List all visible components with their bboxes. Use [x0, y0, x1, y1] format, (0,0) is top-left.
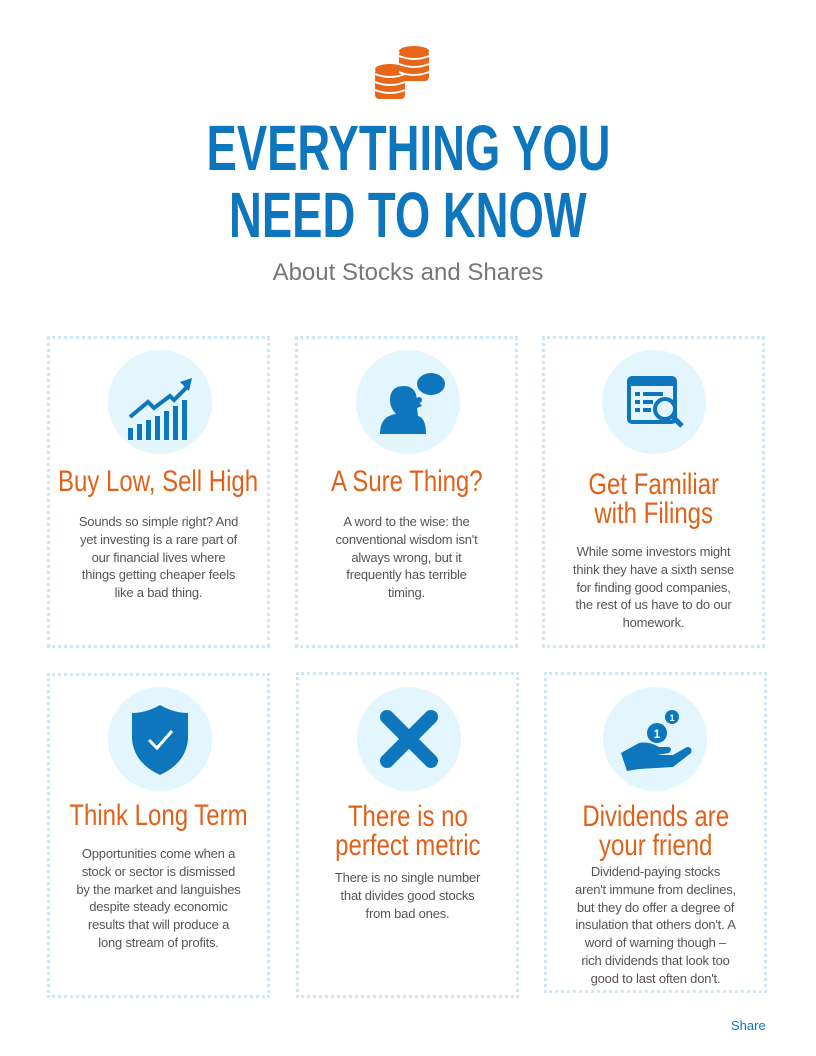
text: good to last often don't. — [591, 971, 720, 986]
panel: no perfect metric — [296, 672, 519, 998]
icon: hand with coins: 1 — [654, 727, 661, 741]
title: EVERYTHING YOU — [206, 112, 610, 184]
text: aren't immune from declines, — [575, 882, 736, 897]
text — [573, 544, 734, 630]
heading: with Filings — [594, 497, 713, 530]
heading — [582, 800, 729, 862]
title: NEED TO KNOW — [229, 179, 587, 251]
text — [76, 846, 241, 950]
heading: There is no — [347, 800, 468, 833]
text: Sounds so simple right? And — [79, 514, 238, 529]
heading: perfect metric — [335, 829, 480, 862]
text: word of warning though – — [585, 935, 726, 950]
text — [335, 870, 480, 921]
text: Dividend-paying stocks — [591, 864, 720, 879]
panel: buy low — [47, 336, 270, 648]
icon: document search — [602, 350, 706, 454]
text: our financial lives where — [92, 550, 225, 565]
icon: hand with coins — [603, 687, 707, 791]
heading: Dividends are — [582, 800, 729, 833]
text: always wrong, but it — [351, 550, 462, 565]
icon: shield — [108, 687, 212, 791]
text — [336, 514, 478, 600]
icon: chart — [108, 350, 212, 454]
text — [575, 864, 736, 986]
heading: A Sure Thing? — [331, 465, 482, 498]
text: results that will produce a — [88, 917, 229, 932]
text: like a bad thing. — [115, 585, 202, 600]
icon: x — [357, 687, 461, 791]
text: that divides good stocks — [341, 888, 474, 903]
text: A word to the wise: the — [343, 514, 470, 529]
panel: sure thing — [295, 336, 518, 648]
text: but they do offer a degree of — [577, 900, 734, 915]
title — [206, 112, 610, 251]
icon: thinking head — [356, 350, 460, 454]
heading: Buy Low, Sell High — [58, 465, 259, 498]
icon: hand with coins: 1 — [669, 713, 675, 723]
text: for finding good companies, — [576, 580, 731, 595]
heading: Think Long Term — [69, 799, 248, 832]
subtitle: About Stocks and Shares — [273, 259, 543, 286]
text: by the market and languishes — [76, 882, 241, 897]
text: homework. — [623, 615, 684, 630]
text: Opportunities come when a — [82, 846, 235, 861]
text: conventional wisdom isn't — [336, 532, 478, 547]
text: insulation that others don't. A — [575, 917, 736, 932]
text: frequently has terrible — [346, 567, 467, 582]
heading — [335, 800, 480, 862]
text: There is no single number — [335, 870, 480, 885]
text: think they have a sixth sense — [573, 562, 734, 577]
heading: Get Familiar — [588, 468, 719, 501]
text: the rest of us have to do our — [575, 597, 732, 612]
text: long stream of profits. — [98, 935, 219, 950]
panel: long term — [47, 673, 270, 998]
text: timing. — [388, 585, 425, 600]
text: from bad ones. — [366, 906, 449, 921]
text — [79, 514, 238, 600]
heading: your friend — [599, 829, 712, 862]
share link: Share — [731, 1018, 766, 1033]
panel: filings — [542, 336, 765, 648]
text: While some investors might — [577, 544, 730, 559]
panel: dividends — [544, 672, 767, 993]
text: stock or sector is dismissed — [82, 864, 235, 879]
heading — [588, 468, 719, 530]
text: despite steady economic — [89, 899, 228, 914]
text: things getting cheaper feels — [82, 567, 235, 582]
text: rich dividends that look too — [581, 953, 730, 968]
text: yet investing is a rare part of — [80, 532, 237, 547]
icon: coins — [375, 46, 429, 99]
